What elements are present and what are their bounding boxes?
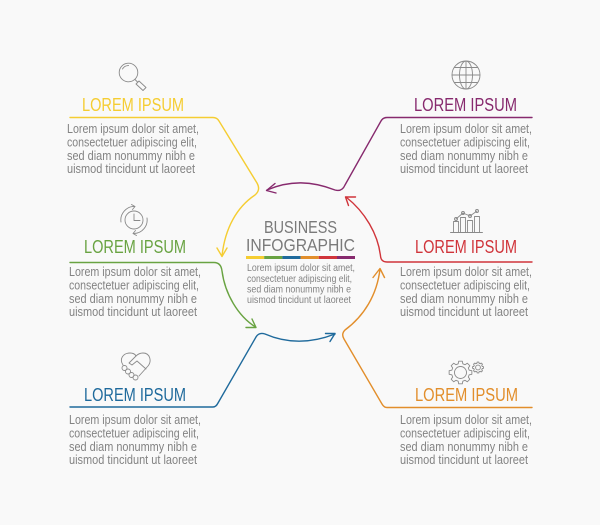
text block: center: consectetuer adipiscing elit, [247, 273, 352, 285]
title: INFOGRAPHIC [246, 235, 355, 255]
panel: purple step [266, 61, 532, 193]
heading: yellow: LOREM IPSUM [82, 95, 184, 115]
title [246, 217, 355, 255]
heading: orange: LOREM IPSUM [415, 385, 518, 405]
icon: magnifier [119, 63, 146, 90]
text block: yellow: sed diam nonummy nibh e [67, 148, 195, 163]
heading: green: LOREM IPSUM [84, 237, 186, 257]
text block: center [247, 262, 355, 306]
heading: purple: LOREM IPSUM [414, 95, 517, 115]
panel: center [246, 217, 355, 306]
color bar [246, 256, 355, 259]
text block: purple [400, 121, 532, 176]
text block: red: uismod tincidunt ut laoreet [400, 304, 528, 319]
text block: yellow: Lorem ipsum dolor sit amet, [67, 121, 199, 136]
panel: yellow step [67, 63, 259, 257]
icon: gears [449, 361, 483, 384]
title: BUSINESS [264, 217, 337, 237]
text block: red: Lorem ipsum dolor sit amet, [400, 264, 532, 279]
heading: blue: LOREM IPSUM [84, 385, 186, 405]
arrow: yellow [70, 118, 259, 256]
text block: yellow: consectetuer adipiscing elit, [67, 134, 197, 150]
text block: purple: consectetuer adipiscing elit, [400, 134, 530, 150]
arrow: blue [70, 333, 335, 407]
text block: center: sed diam nonummy nibh e [247, 284, 351, 296]
text block: red [400, 264, 532, 319]
text block: yellow [67, 121, 199, 176]
heading: red: LOREM IPSUM [415, 237, 517, 257]
panel: orange step [343, 268, 532, 467]
icon: clock [121, 204, 147, 236]
text block: yellow: uismod tincidunt ut laoreet [67, 161, 195, 176]
text block: blue [69, 412, 201, 467]
panel: blue step [69, 333, 335, 467]
text block: blue: Lorem ipsum dolor sit amet, [69, 412, 201, 427]
text block: orange: sed diam nonummy nibh e [400, 439, 528, 454]
text block: purple: Lorem ipsum dolor sit amet, [400, 121, 532, 136]
arrow: red [346, 197, 532, 262]
text block: orange [400, 412, 532, 467]
arrow: green [70, 262, 256, 328]
text block: green: sed diam nonummy nibh e [69, 291, 197, 306]
text block: red: consectetuer adipiscing elit, [400, 278, 530, 292]
arrow: purple [266, 118, 532, 193]
panel: red step [346, 197, 532, 319]
icon: handshake [121, 353, 150, 380]
icon: globe [452, 61, 480, 89]
text block: blue: uismod tincidunt ut laoreet [69, 452, 197, 467]
text block: center: uismod tincidunt ut laoreet [247, 294, 351, 306]
text block: orange: consectetuer adipiscing elit, [400, 426, 530, 440]
text block: orange: Lorem ipsum dolor sit amet, [400, 412, 532, 427]
text block: green [69, 264, 201, 319]
text block: orange: uismod tincidunt ut laoreet [400, 452, 528, 467]
text block: blue: consectetuer adipiscing elit, [69, 426, 199, 440]
text block: purple: sed diam nonummy nibh e [400, 148, 528, 163]
text block: purple: uismod tincidunt ut laoreet [400, 161, 528, 176]
text block: green: uismod tincidunt ut laoreet [69, 304, 197, 319]
text block: green: consectetuer adipiscing elit, [69, 278, 199, 292]
text block: green: Lorem ipsum dolor sit amet, [69, 264, 201, 279]
arrow: orange [343, 268, 532, 408]
icon: bar chart [450, 210, 482, 232]
text block: red: sed diam nonummy nibh e [400, 291, 528, 306]
text block: blue: sed diam nonummy nibh e [69, 439, 197, 454]
text block: center: Lorem ipsum dolor sit amet, [247, 262, 355, 274]
panel: green step [69, 204, 256, 328]
